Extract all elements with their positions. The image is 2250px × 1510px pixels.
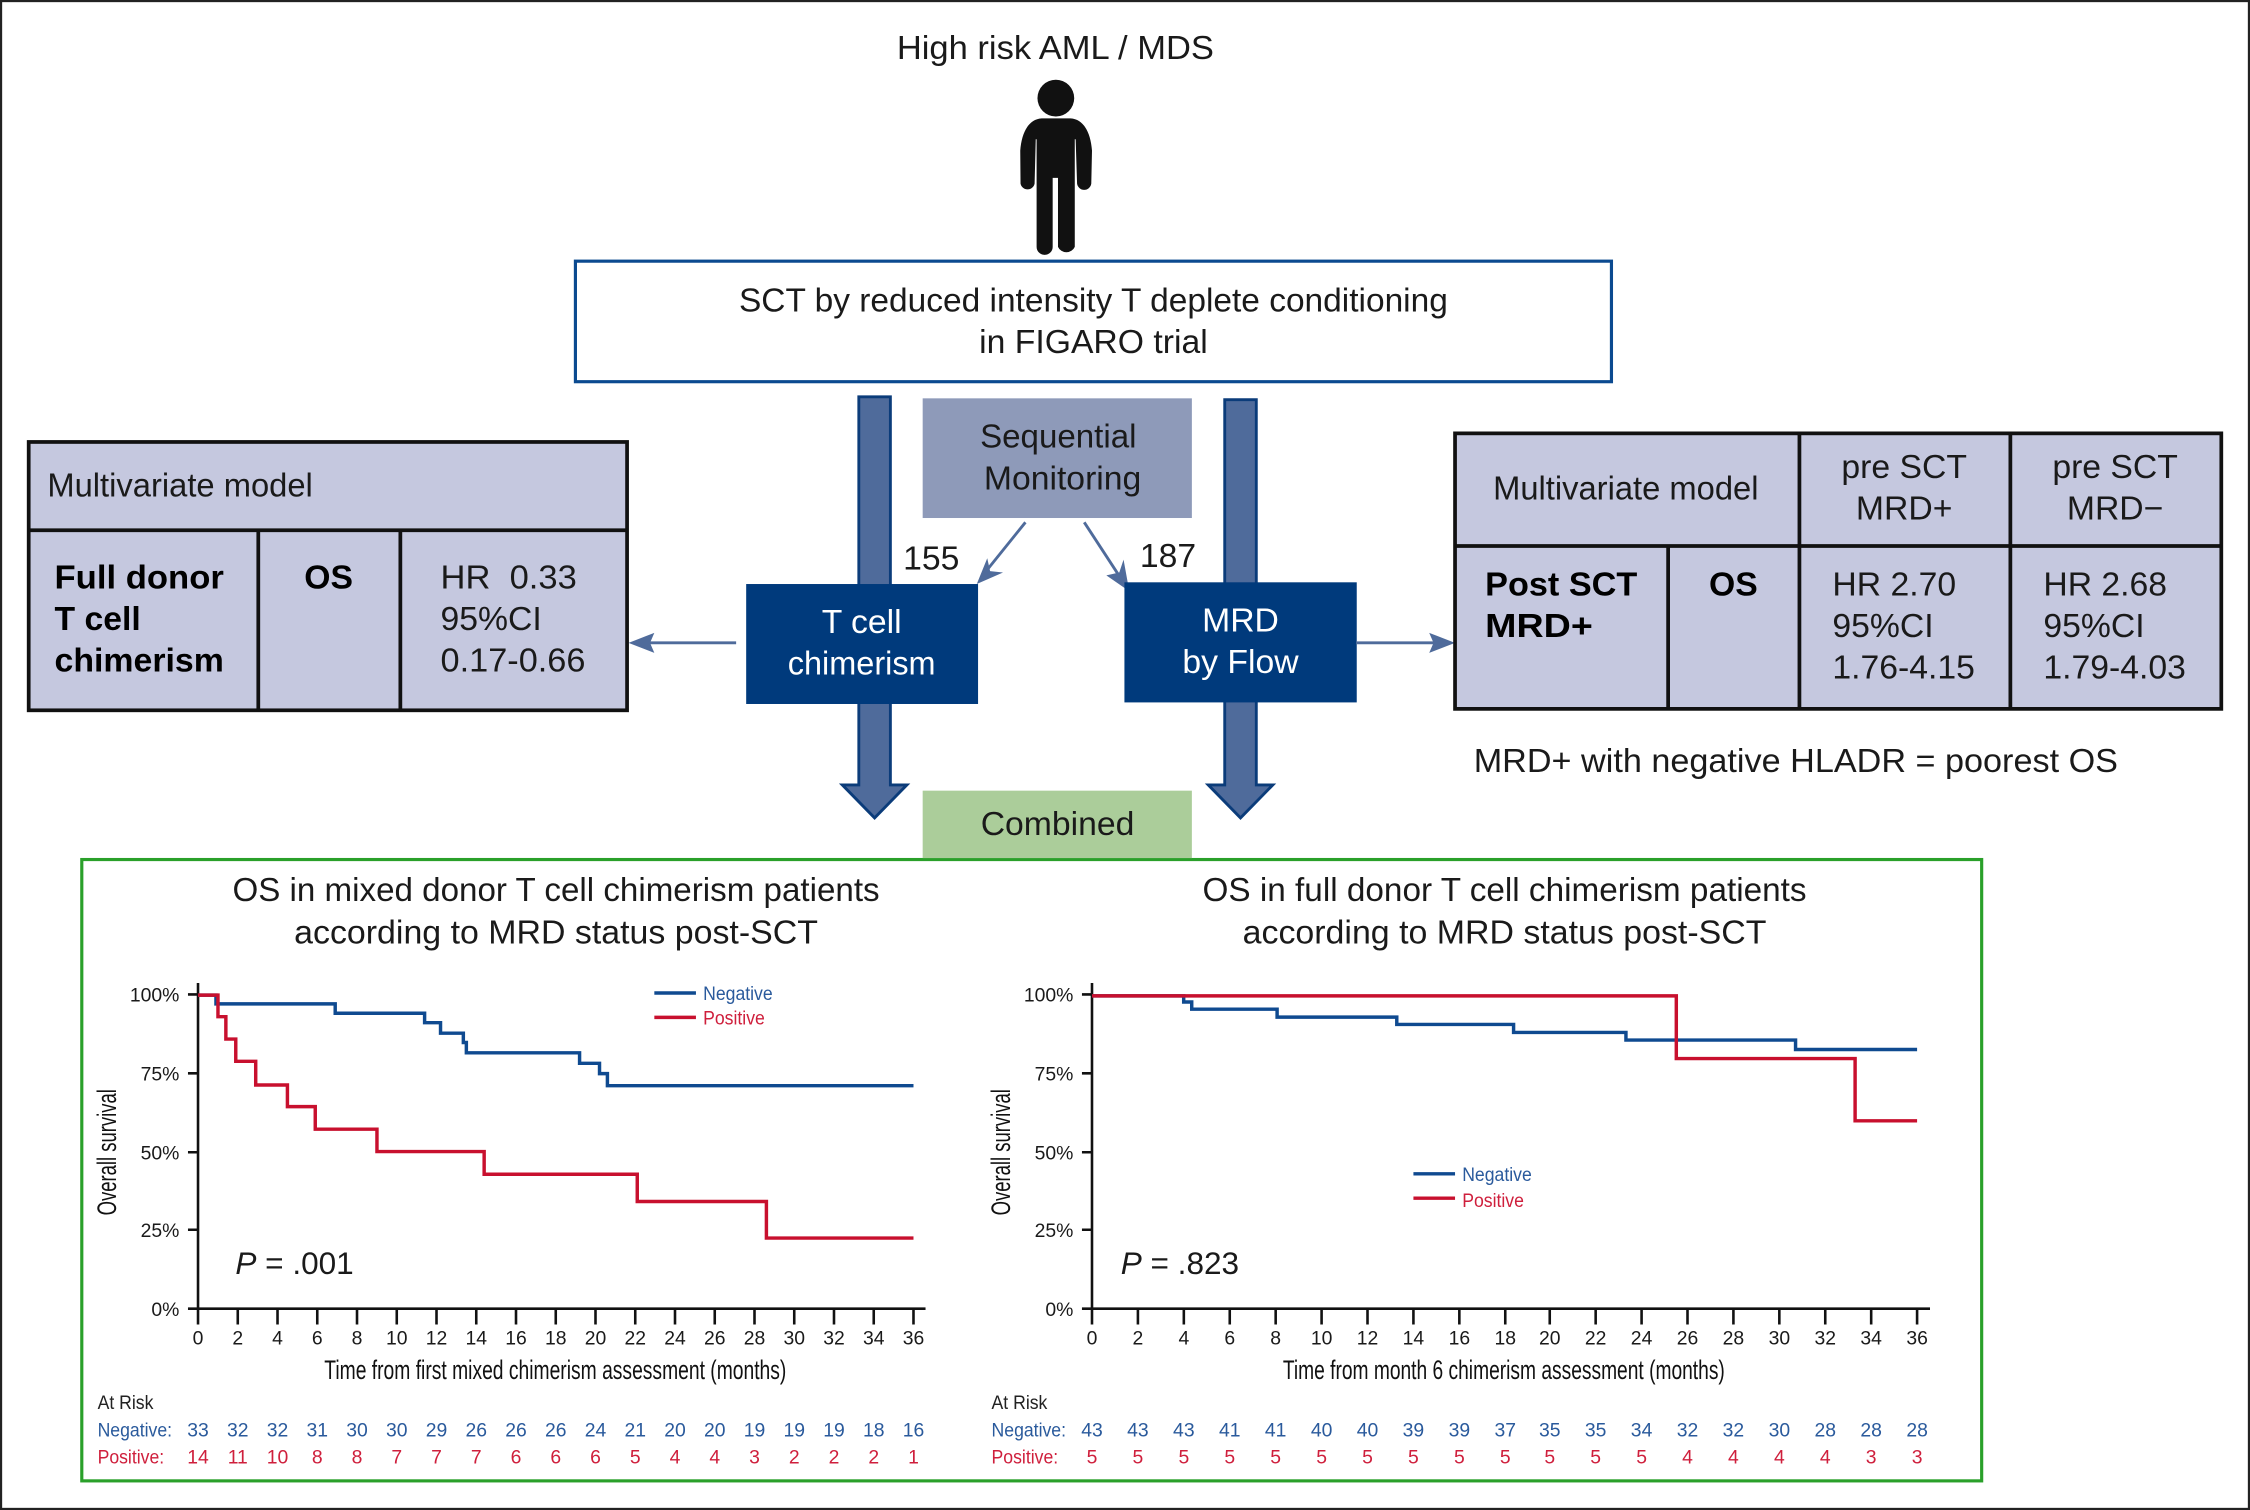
table: left multivariate model: T cell — [55, 600, 141, 638]
chart: full chimerism survival — [985, 983, 1930, 1469]
at risk table: 5 — [1133, 1447, 1143, 1469]
at risk table: 8 — [312, 1447, 323, 1469]
at risk table — [98, 1391, 924, 1469]
box: sequential monitoring: Monitoring — [984, 459, 1141, 497]
x tick labels: 28 — [1723, 1328, 1744, 1350]
x tick labels: 2 — [232, 1328, 243, 1350]
x tick labels: 22 — [624, 1328, 646, 1350]
at risk table: 4 — [1820, 1447, 1831, 1469]
box: sequential monitoring — [923, 398, 1192, 518]
at risk table — [992, 1391, 1928, 1469]
at risk table: 4 — [1774, 1447, 1785, 1469]
table: right multivariate model: 1.79-4.03 — [2043, 649, 2186, 687]
box: SCT conditioning — [575, 261, 1611, 382]
at risk table: 2 — [829, 1447, 839, 1469]
x tick labels: 10 — [386, 1328, 408, 1350]
x tick labels: 24 — [664, 1328, 686, 1350]
box: SCT conditioning: in FIGARO trial — [979, 323, 1208, 361]
at risk table: 4 — [1682, 1447, 1693, 1469]
x tick labels: 8 — [352, 1328, 362, 1350]
arrow: left vertical — [842, 397, 907, 818]
x tick labels: 18 — [545, 1328, 567, 1350]
at risk table: 5 — [630, 1447, 641, 1469]
y tick labels: 75% — [141, 1064, 179, 1086]
at risk table: 43 — [1081, 1419, 1103, 1441]
x tick labels: 36 — [903, 1328, 924, 1350]
x tick labels: 14 — [1403, 1328, 1424, 1350]
panel: combined green frame — [82, 860, 1982, 1481]
at risk table: 26 — [505, 1419, 527, 1441]
at risk table: 30 — [346, 1419, 368, 1441]
table: left multivariate model: 0.17-0.66 — [441, 642, 585, 680]
at risk table: 28 — [1814, 1419, 1836, 1441]
box: MRD by Flow — [1124, 582, 1357, 702]
at risk table: 26 — [465, 1419, 487, 1441]
x tick labels: 6 — [312, 1328, 323, 1350]
at risk table: 5 — [1178, 1447, 1189, 1469]
x tick labels: 26 — [704, 1328, 726, 1350]
at risk table: 43 — [1173, 1419, 1195, 1441]
table: left multivariate model — [29, 442, 627, 710]
at risk table: 39 — [1449, 1419, 1470, 1441]
at risk table: 35 — [1585, 1419, 1606, 1441]
legend: Negative — [703, 982, 773, 1004]
x tick labels: 34 — [1860, 1328, 1882, 1350]
at risk table: 5 — [1270, 1447, 1281, 1469]
x tick labels: 20 — [1539, 1328, 1561, 1350]
at risk table: 6 — [511, 1447, 521, 1469]
x tick labels: 32 — [823, 1328, 845, 1350]
at risk table: 6 — [550, 1447, 561, 1469]
at risk table: 30 — [386, 1419, 408, 1441]
at risk table: Positive: — [992, 1446, 1058, 1468]
at risk table: 5 — [1408, 1447, 1419, 1469]
x tick labels: 4 — [272, 1328, 283, 1350]
y tick labels: 0% — [1045, 1299, 1073, 1321]
at risk table: 24 — [585, 1419, 606, 1441]
box: sequential monitoring: Sequential — [980, 418, 1136, 456]
legend: Negative — [1462, 1163, 1532, 1185]
at risk table: 26 — [545, 1419, 567, 1441]
table: right multivariate model: HR 2.70 — [1832, 566, 1956, 604]
at risk table: 40 — [1357, 1419, 1378, 1441]
at risk table: 37 — [1494, 1419, 1516, 1441]
box: MRD by Flow: by Flow — [1182, 643, 1299, 681]
table: left multivariate model: Multivariate model — [47, 466, 313, 504]
at risk table: 40 — [1311, 1419, 1333, 1441]
heading: right chart title: according to MRD status post-SCT — [1243, 913, 1766, 951]
at risk table: Negative: — [992, 1419, 1066, 1441]
x tick labels: 0 — [193, 1328, 204, 1350]
x tick labels: 20 — [585, 1328, 606, 1350]
box: T cell chimerism — [746, 584, 978, 704]
negative curve — [1092, 996, 1917, 1050]
at risk table: 5 — [1454, 1447, 1465, 1469]
box: combined — [923, 791, 1192, 858]
heading: left chart title: according to MRD status post-SCT — [294, 913, 818, 951]
table: right multivariate model: Multivariate model — [1493, 469, 1759, 507]
x tick labels: 16 — [505, 1328, 527, 1350]
table: right multivariate model: 95%CI — [2043, 607, 2145, 645]
table: left multivariate model: OS — [304, 558, 353, 596]
y tick labels — [130, 985, 179, 1321]
y tick labels: 0% — [151, 1299, 179, 1321]
negative curve — [198, 995, 913, 1086]
table: right multivariate model: 1.76-4.15 — [1832, 649, 1975, 687]
table: right multivariate model: MRD+ — [1485, 607, 1593, 645]
at risk table: 31 — [306, 1419, 328, 1441]
arrow: monitoring to T cell chimerism — [977, 522, 1025, 584]
table: right multivariate model: MRD+ — [1856, 489, 1952, 527]
y tick labels: 25% — [1035, 1220, 1073, 1242]
table: right multivariate model: pre SCT — [2052, 448, 2178, 486]
at risk table: 35 — [1539, 1419, 1561, 1441]
y tick labels — [1024, 985, 1073, 1321]
heading: left chart title: OS in mixed donor T cell chimerism patients — [232, 871, 880, 909]
legend — [654, 982, 773, 1029]
x tick labels: 14 — [465, 1328, 487, 1350]
icon: person — [1020, 80, 1092, 255]
at risk table: 3 — [749, 1447, 760, 1469]
at risk table: 32 — [1723, 1419, 1744, 1441]
x tick labels: 10 — [1311, 1328, 1333, 1350]
arrow: right vertical — [1208, 400, 1273, 818]
x tick labels: 6 — [1224, 1328, 1235, 1350]
at risk table: 32 — [267, 1419, 288, 1441]
at risk table: 29 — [426, 1419, 447, 1441]
at risk table: 10 — [267, 1447, 289, 1469]
box: T cell chimerism: chimerism — [788, 644, 936, 682]
at risk table: 32 — [1677, 1419, 1698, 1441]
at risk table: Negative: — [98, 1419, 172, 1441]
at risk table: 5 — [1636, 1447, 1647, 1469]
table: right multivariate model: HR 2.68 — [2043, 566, 2167, 604]
box: combined: Combined — [981, 805, 1134, 843]
y tick labels: 75% — [1035, 1064, 1073, 1086]
x tick labels: 28 — [744, 1328, 765, 1350]
title: High risk AML / MDS: High risk AML / MDS — [897, 29, 1214, 67]
box: MRD by Flow: MRD — [1202, 601, 1279, 639]
at risk table: 8 — [352, 1447, 362, 1469]
at risk table: 1 — [908, 1447, 919, 1469]
chart: mixed chimerism survival — [91, 982, 926, 1469]
box: SCT conditioning: SCT by reduced intensity T deplete conditioning — [739, 281, 1448, 319]
at risk table: 41 — [1265, 1419, 1286, 1441]
at risk table: Positive: — [98, 1446, 164, 1468]
at risk table: 2 — [789, 1447, 800, 1469]
y tick labels: 50% — [1035, 1142, 1073, 1164]
at risk table: 33 — [187, 1419, 209, 1441]
table: left multivariate model: chimerism — [55, 642, 224, 680]
heading: left chart title — [232, 871, 880, 951]
arrow: monitoring to MRD by flow — [1084, 522, 1129, 591]
x tick labels: 12 — [1357, 1328, 1378, 1350]
legend: Positive — [1462, 1189, 1524, 1211]
at risk table: At Risk — [98, 1391, 154, 1413]
x axis label: Time from month 6 chimerism assessment (months) — [1283, 1354, 1725, 1385]
positive curve — [1092, 996, 1917, 1121]
at risk table: 14 — [187, 1447, 209, 1469]
at risk table: 2 — [868, 1447, 879, 1469]
at risk table: 34 — [1631, 1419, 1653, 1441]
y axis label: Overall survival — [91, 1089, 122, 1215]
label: 187: 187 — [1140, 537, 1196, 575]
at risk table: 19 — [783, 1419, 805, 1441]
at risk table: 4 — [1728, 1447, 1739, 1469]
at risk table: 21 — [624, 1419, 646, 1441]
at risk table: 4 — [709, 1447, 720, 1469]
x tick labels: 0 — [1087, 1328, 1098, 1350]
note: MRD+ with negative HLADR: MRD+ with negative HLADR = poorest OS — [1474, 742, 2118, 780]
at risk table: 19 — [744, 1419, 765, 1441]
y tick labels: 25% — [141, 1220, 179, 1242]
at risk table: 30 — [1769, 1419, 1790, 1441]
p value: P = .001 — [235, 1245, 354, 1281]
x tick labels: 36 — [1906, 1328, 1928, 1350]
axes and ticks — [1082, 983, 1930, 1324]
arrow: to left table — [629, 633, 736, 653]
x tick labels: 4 — [1178, 1328, 1189, 1350]
at risk table: 20 — [664, 1419, 686, 1441]
at risk table: 5 — [1590, 1447, 1601, 1469]
x tick labels: 2 — [1133, 1328, 1143, 1350]
legend — [1413, 1163, 1532, 1211]
at risk table: 41 — [1219, 1419, 1241, 1441]
label: 155: 155 — [903, 540, 959, 578]
at risk table: 5 — [1087, 1447, 1097, 1469]
at risk table: 19 — [823, 1419, 845, 1441]
at risk table: 18 — [863, 1419, 885, 1441]
x axis label: Time from first mixed chimerism assessment (months) — [324, 1354, 786, 1385]
box: T cell chimerism: T cell — [822, 603, 902, 641]
table: left multivariate model: 95%CI — [441, 600, 542, 638]
y tick labels: 100% — [130, 985, 179, 1007]
table: left multivariate model: Full donor — [55, 558, 224, 596]
at risk table: 39 — [1403, 1419, 1424, 1441]
at risk table: 32 — [227, 1419, 249, 1441]
table: right multivariate model: 95%CI — [1832, 607, 1934, 645]
x tick labels: 8 — [1270, 1328, 1281, 1350]
at risk table: 6 — [590, 1447, 601, 1469]
at risk table: 3 — [1866, 1447, 1877, 1469]
table: right multivariate model: OS — [1709, 566, 1758, 604]
table: right multivariate model — [1455, 433, 2221, 709]
at risk table: 28 — [1906, 1419, 1928, 1441]
at risk table: 20 — [704, 1419, 726, 1441]
x tick labels: 34 — [863, 1328, 885, 1350]
at risk table: 4 — [670, 1447, 681, 1469]
x tick labels: 16 — [1449, 1328, 1470, 1350]
x tick labels — [193, 1328, 924, 1350]
x tick labels — [1087, 1328, 1928, 1350]
at risk table: 7 — [431, 1447, 442, 1469]
at risk table: 5 — [1362, 1447, 1373, 1469]
at risk table: 7 — [391, 1447, 402, 1469]
table: right multivariate model: pre SCT — [1841, 448, 1967, 486]
x tick labels: 24 — [1631, 1328, 1653, 1350]
at risk table: 5 — [1224, 1447, 1235, 1469]
x tick labels: 22 — [1585, 1328, 1606, 1350]
at risk table: 5 — [1544, 1447, 1555, 1469]
heading: right chart title: OS in full donor T cell chimerism patients — [1202, 871, 1807, 909]
at risk table: 11 — [228, 1447, 248, 1469]
table: right multivariate model: Post SCT — [1485, 566, 1638, 604]
heading: right chart title — [1202, 871, 1807, 951]
at risk table: 5 — [1500, 1447, 1511, 1469]
positive curve — [198, 995, 913, 1238]
arrow: to right table — [1356, 633, 1455, 653]
y axis label: Overall survival — [985, 1089, 1016, 1215]
legend: Positive — [703, 1007, 765, 1029]
p value: P = .823 — [1121, 1245, 1239, 1281]
at risk table: 43 — [1127, 1419, 1149, 1441]
y tick labels: 100% — [1024, 985, 1073, 1007]
at risk table: At Risk — [992, 1391, 1048, 1413]
x tick labels: 30 — [1769, 1328, 1790, 1350]
at risk table: 3 — [1912, 1447, 1922, 1469]
at risk table: 7 — [471, 1447, 482, 1469]
axes and ticks — [188, 983, 926, 1324]
x tick labels: 26 — [1677, 1328, 1698, 1350]
x tick labels: 32 — [1814, 1328, 1836, 1350]
x tick labels: 30 — [783, 1328, 805, 1350]
at risk table: 5 — [1316, 1447, 1327, 1469]
at risk table: 16 — [903, 1419, 924, 1441]
x tick labels: 18 — [1494, 1328, 1516, 1350]
at risk table: 28 — [1860, 1419, 1882, 1441]
table: left multivariate model: HR 0.33 — [441, 558, 577, 596]
y tick labels: 50% — [141, 1142, 179, 1164]
table: right multivariate model: MRD− — [2067, 489, 2163, 527]
x tick labels: 12 — [426, 1328, 447, 1350]
